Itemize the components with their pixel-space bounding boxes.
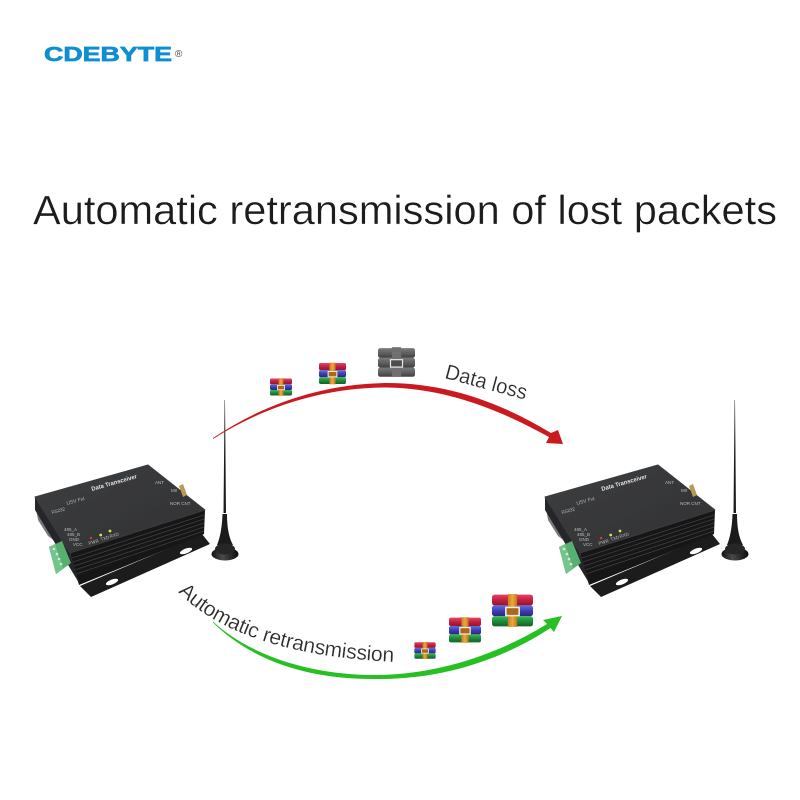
left device labels: VCC <box>73 542 83 547</box>
right device labels: 485_B <box>577 532 590 537</box>
right device labels: TXD <box>610 534 621 542</box>
right device serial port <box>546 508 572 542</box>
left device labels: NOR CNT <box>170 501 191 506</box>
right device: data transceiver <box>545 465 720 597</box>
left device labels: TXD <box>100 534 111 542</box>
left device SMA connector <box>179 484 187 497</box>
title: Automatic retransmission of lost packets <box>33 187 777 233</box>
right device top face <box>545 465 715 553</box>
left device labels: M0 <box>171 488 178 493</box>
left device labels: ANT <box>155 480 164 485</box>
left device labels: RS232 <box>51 506 66 515</box>
logo: CDEBYTE: ® <box>175 49 183 60</box>
left device side <box>35 497 79 583</box>
label: Automatic retransmission: Automatic retransmission <box>178 586 393 662</box>
left device labels: RXD <box>109 531 120 539</box>
large archive packet, bottom <box>492 594 533 627</box>
logo: CDEBYTE: CDEBYTE <box>44 43 172 66</box>
right device labels: 485_A <box>574 527 587 532</box>
right device labels: RS232 <box>561 506 576 515</box>
label: Data loss: Data loss <box>443 361 530 405</box>
left device mounting flange <box>80 534 210 597</box>
small archive packet, top <box>270 378 292 396</box>
right device labels: NOR CNT <box>680 501 701 506</box>
right device SMA connector <box>689 484 697 497</box>
right device labels: Data Transceiver <box>601 474 648 493</box>
right antenna <box>722 400 748 560</box>
small archive packet, bottom <box>414 642 436 659</box>
right device labels: M0 <box>681 488 688 493</box>
left device serial port <box>36 508 62 542</box>
left antenna <box>212 400 238 560</box>
left device labels <box>51 474 191 547</box>
right device green terminal block <box>559 541 581 574</box>
left device labels: Data Transceiver <box>91 474 138 493</box>
right device labels: GND <box>579 537 590 542</box>
left device top face <box>35 465 205 553</box>
medium archive packet, bottom <box>449 617 481 643</box>
left device labels: USV Fxt <box>66 496 86 507</box>
right device labels: PWR <box>598 538 610 546</box>
left device labels: 485_A <box>64 527 77 532</box>
right device labels: ANT <box>665 480 674 485</box>
left device labels: GND <box>69 537 80 542</box>
right device labels: USV Fxt <box>576 496 596 507</box>
right device side <box>545 497 589 583</box>
right device LEDs <box>600 537 602 539</box>
left device labels: 485_B <box>67 532 80 537</box>
right device labels: VCC <box>583 542 593 547</box>
green arrow: retransmission path <box>213 616 562 679</box>
left device: data transceiver <box>35 465 210 597</box>
left device labels: PWR <box>88 538 100 546</box>
left device green terminal block <box>49 541 71 574</box>
red arrow: data loss path <box>213 383 563 444</box>
lost packet, gray archive <box>378 347 415 377</box>
right device labels <box>561 474 701 547</box>
left device body front <box>70 510 205 585</box>
medium archive packet, top <box>319 363 346 384</box>
right device body front <box>580 510 715 585</box>
right device labels: RXD <box>619 531 630 539</box>
right device mounting flange <box>590 534 720 597</box>
left device LEDs <box>90 537 92 539</box>
